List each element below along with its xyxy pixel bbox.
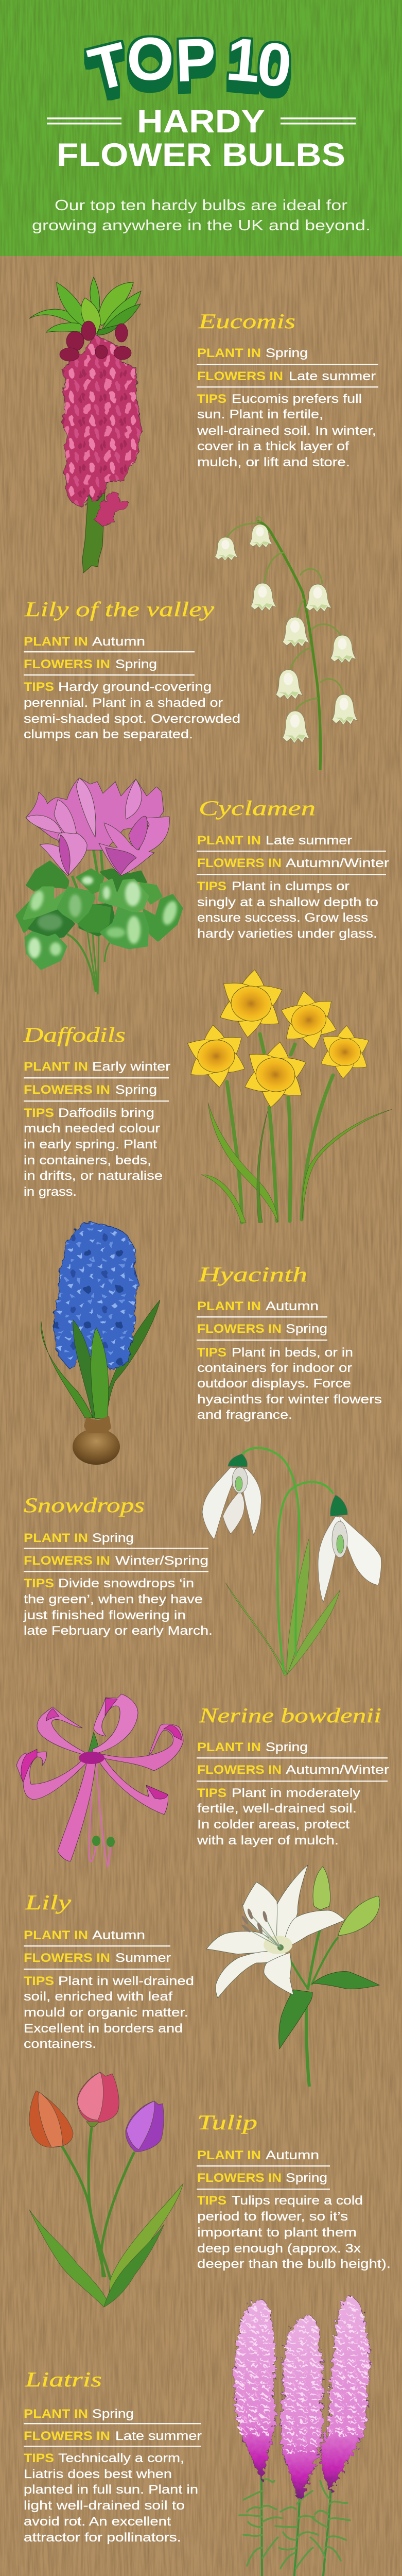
hyacinth back leaves xyxy=(41,1300,160,1418)
tips xyxy=(23,1577,213,1638)
daffodil stems xyxy=(227,1034,333,1223)
tulip leaves xyxy=(29,2183,183,2307)
tips: Tulips require a cold xyxy=(232,2194,363,2208)
plant in xyxy=(24,635,145,649)
plant in: PLANT IN xyxy=(24,1060,88,1074)
plant in xyxy=(24,1531,134,1545)
text block: lily of the valley xyxy=(24,598,240,741)
hyacinth flower spike xyxy=(54,1222,138,1370)
eucomis stem xyxy=(82,489,105,573)
plant in: PLANT IN xyxy=(24,2407,88,2421)
plant in xyxy=(197,1299,319,1313)
plant in: PLANT IN xyxy=(24,1928,88,1942)
plant in: Late summer xyxy=(266,834,352,848)
heading: Snowdrops xyxy=(24,1494,145,1517)
tips: Eucomis prefers full xyxy=(232,392,362,406)
title: TOP 10 xyxy=(82,25,294,105)
intro text: growing anywhere in the UK and beyond. xyxy=(32,217,371,234)
eucomis lower floret xyxy=(94,491,129,527)
title: TOP 10: 1 xyxy=(223,25,263,96)
tips xyxy=(197,1786,360,1848)
flowers in xyxy=(24,2429,202,2443)
tips: TIPS xyxy=(197,392,226,406)
tips: with a layer of mulch. xyxy=(197,1834,339,1848)
intro text xyxy=(32,197,371,234)
lily of the valley bells xyxy=(215,524,358,743)
flowers in: FLOWERS IN xyxy=(24,657,110,671)
plant in: Autumn xyxy=(92,635,145,649)
plant in: Spring xyxy=(92,1531,134,1545)
liatris leaves xyxy=(239,2479,350,2568)
tips: just finished flowering in xyxy=(23,1608,186,1622)
text block: daffodils xyxy=(23,1023,170,1199)
illustration: lily of the valley xyxy=(215,517,358,770)
illustration: hyacinth xyxy=(41,1222,160,1465)
plant in xyxy=(197,834,352,848)
flowers in xyxy=(197,1763,389,1777)
plant in: Autumn xyxy=(92,1928,145,1942)
tips: mould or organic matter. xyxy=(24,2006,188,2020)
tips: late February or early March. xyxy=(24,1624,213,1638)
illustration: tulip xyxy=(29,2072,183,2307)
tips: in grass. xyxy=(24,1185,77,1199)
tips: TIPS xyxy=(197,2194,226,2208)
flowers in: FLOWERS IN xyxy=(24,1554,110,1568)
title: HARDY: HARDY xyxy=(137,104,265,140)
header xyxy=(32,25,371,234)
heading: Lily xyxy=(25,1891,71,1914)
title: TOP 10: P xyxy=(174,26,217,95)
tips: perennial. Plant in a shaded or xyxy=(24,696,223,710)
illustration: lily xyxy=(206,1865,380,2087)
cyclamen leaves xyxy=(17,862,182,969)
heading: Lily of the valley xyxy=(24,598,214,621)
plant in: Spring xyxy=(92,2407,134,2421)
tips: mulch, or lift and store. xyxy=(197,455,350,469)
tips: in early spring. Plant xyxy=(24,1138,157,1151)
nerine stamens xyxy=(90,1759,111,1866)
tips: Plant in well-drained xyxy=(58,1974,194,1988)
flowers in: Late summer xyxy=(289,369,376,383)
snowdrop flower two xyxy=(318,1495,381,1602)
eucomis buds xyxy=(60,321,131,361)
flowers in: Spring xyxy=(286,2171,327,2185)
lily of the valley pedicels xyxy=(227,517,343,710)
plant in: PLANT IN xyxy=(197,1299,261,1313)
tips xyxy=(24,1106,163,1199)
nerine ovary xyxy=(88,1732,100,1756)
lily stems xyxy=(290,1928,338,2087)
flowers in: FLOWERS IN xyxy=(197,2171,282,2185)
plant in xyxy=(197,1740,308,1754)
liatris spikes xyxy=(234,2295,370,2500)
text block: tulip xyxy=(197,2111,391,2271)
text block: snowdrops xyxy=(23,1494,213,1638)
flowers in: FLOWERS IN xyxy=(197,369,283,383)
tips: fertile, well-drained soil. xyxy=(197,1802,357,1816)
tips xyxy=(197,392,376,469)
plant in: Autumn xyxy=(266,2148,319,2162)
tips: sun. Plant in fertile, xyxy=(197,408,323,421)
tips: singly at a shallow depth to xyxy=(197,895,378,909)
flowers in: Winter/Spring xyxy=(115,1554,208,1568)
flowers in xyxy=(197,2171,327,2185)
plant in: PLANT IN xyxy=(24,1531,88,1545)
title: FLOWER BULBS: FLOWER BULBS xyxy=(57,137,345,173)
tips: Plant in clumps or xyxy=(232,879,349,893)
plant in: PLANT IN xyxy=(197,2148,261,2162)
nerine petals xyxy=(16,1694,183,1861)
tips: clumps can be separated. xyxy=(24,727,193,741)
text block: nerine bowdenii xyxy=(197,1704,389,1848)
eucomis leaf crown xyxy=(29,277,141,336)
flowers in: FLOWERS IN xyxy=(24,1951,110,1965)
tulip flower: purple xyxy=(126,2101,164,2151)
lily petals xyxy=(206,1865,345,1998)
title: TOP 10: O xyxy=(127,25,174,93)
tips: well-drained soil. In winter, xyxy=(197,424,376,438)
flowers in xyxy=(24,1083,157,1097)
flowers in: Late summer xyxy=(115,2429,202,2443)
daffodil flowers xyxy=(180,966,375,1112)
heading: Nerine bowdenii xyxy=(199,1704,381,1727)
tulip flower: pink xyxy=(77,2072,119,2127)
tips: light well-drained soil to xyxy=(24,2499,185,2513)
hyacinth bulb xyxy=(73,1416,120,1465)
heading: Hyacinth xyxy=(198,1263,307,1286)
flowers in: FLOWERS IN xyxy=(197,856,282,870)
plant in: PLANT IN xyxy=(197,1740,261,1754)
flowers in: Spring xyxy=(115,657,157,671)
flowers in: Autumn/Winter xyxy=(286,856,389,870)
tips: the green’, when they have xyxy=(24,1592,203,1606)
tips: outdoor displays. Force xyxy=(197,1377,351,1391)
tips: period to flower, so it’s xyxy=(197,2210,348,2224)
illustration: snowdrops xyxy=(202,1448,381,1675)
tips: In colder areas, protect xyxy=(197,1818,349,1832)
flowers in: Spring xyxy=(286,1322,327,1336)
tips: TIPS xyxy=(197,1786,226,1800)
tips: Daffodils bring xyxy=(58,1106,154,1120)
illustration: cyclamen xyxy=(17,778,182,994)
plant in: Early winter xyxy=(92,1060,170,1074)
tips: attractor for pollinators. xyxy=(24,2531,181,2545)
heading: Daffodils xyxy=(23,1023,126,1046)
tips: deeper than the bulb height). xyxy=(197,2257,391,2271)
tips: hardy varieties under glass. xyxy=(197,927,377,941)
plant in xyxy=(197,2148,319,2162)
flowers in: Spring xyxy=(115,1083,157,1097)
illustration: nerine bowdenii xyxy=(16,1694,183,1866)
illustration: liatris xyxy=(234,2295,370,2576)
tips: semi-shaded spot. Overcrowded xyxy=(24,712,240,726)
tips xyxy=(24,2451,198,2545)
snowdrop leaves xyxy=(225,1539,340,1675)
flowers in xyxy=(197,369,376,383)
tips: Technically a corm, xyxy=(58,2451,184,2465)
liatris florets xyxy=(234,2295,370,2452)
lily stamens xyxy=(241,1908,281,1947)
heading: Tulip xyxy=(197,2111,257,2134)
tips: TIPS xyxy=(24,680,54,694)
plant in: Spring xyxy=(266,346,308,360)
lily buds xyxy=(313,1867,380,1936)
tips: in drifts, or naturalise xyxy=(24,1169,163,1183)
text block: cyclamen xyxy=(197,796,389,941)
plant in xyxy=(24,2407,134,2421)
left title rules xyxy=(47,117,121,125)
illustration: eucomis xyxy=(29,277,142,573)
tips: cover in a thick layer of xyxy=(197,439,349,453)
plant in: Spring xyxy=(266,1740,308,1754)
tips: in containers, beds, xyxy=(24,1154,151,1167)
hyacinth front leaves xyxy=(73,1320,109,1419)
nerine anthers xyxy=(92,1836,115,1847)
plant in xyxy=(24,1928,145,1942)
text block: liatris xyxy=(24,2368,202,2545)
tips: TIPS xyxy=(24,1577,54,1590)
title: TOP 10: T xyxy=(82,29,135,105)
tips: hyacinths for winter flowers xyxy=(197,1393,382,1406)
flowers in: Autumn/Winter xyxy=(286,1763,389,1777)
lily leaves xyxy=(279,1972,379,2049)
tips: Hardy ground-covering xyxy=(58,680,212,694)
flowers in xyxy=(197,856,389,870)
tips xyxy=(197,2194,391,2271)
tips: avoid rot. An excellent xyxy=(24,2515,171,2529)
text block: hyacinth xyxy=(197,1263,382,1422)
flowers in: FLOWERS IN xyxy=(24,2429,110,2443)
tulip flower: red xyxy=(29,2091,73,2147)
tips: TIPS xyxy=(24,2451,54,2465)
liatris stems xyxy=(261,2478,330,2576)
tips: Plant in beds, or in xyxy=(232,1346,353,1360)
daffodil leaves xyxy=(201,1103,392,1223)
heading: Cyclamen xyxy=(199,796,316,820)
tips: much needed colour xyxy=(24,1122,160,1136)
plant in: PLANT IN xyxy=(197,834,261,848)
tips: containers for indoor or xyxy=(197,1361,352,1375)
flowers in xyxy=(24,1554,208,1568)
lily of the valley stem xyxy=(257,521,321,770)
tips: TIPS xyxy=(197,1346,226,1360)
tips: TIPS xyxy=(24,1106,54,1120)
cyclamen flowers xyxy=(26,778,169,876)
plant in: PLANT IN xyxy=(197,346,261,360)
text block: eucomis xyxy=(197,310,378,469)
right title rules xyxy=(281,117,356,125)
tips: ensure success. Grow less xyxy=(197,911,368,925)
tips: deep enough (approx. 3x xyxy=(197,2242,361,2256)
title: TOP 10: 0 xyxy=(254,29,294,100)
tips xyxy=(197,1346,382,1422)
tips: planted in full sun. Plant in xyxy=(24,2483,198,2497)
tips: TIPS xyxy=(197,879,226,893)
tips: Divide snowdrops ‘in xyxy=(58,1577,194,1590)
tips xyxy=(24,680,240,741)
tips: containers. xyxy=(24,2037,96,2051)
flowers in: FLOWERS IN xyxy=(197,1322,282,1336)
cyclamen stems xyxy=(67,845,110,994)
snowdrop flower one xyxy=(202,1454,261,1539)
plant in: PLANT IN xyxy=(24,635,88,649)
plant in: Autumn xyxy=(266,1299,319,1313)
flowers in xyxy=(24,1951,171,1965)
text block: lily xyxy=(24,1891,194,2051)
tips: important to plant them xyxy=(197,2226,357,2240)
tips: Plant in moderately xyxy=(232,1786,360,1800)
tips xyxy=(24,1974,194,2051)
plant in xyxy=(197,346,308,360)
tips: soil, enriched with leaf xyxy=(24,1990,172,2004)
heading: Liatris xyxy=(25,2368,102,2391)
tips: TIPS xyxy=(24,1974,54,1988)
eucomis flower column xyxy=(62,335,142,507)
tips: and fragrance. xyxy=(197,1408,292,1422)
flowers in xyxy=(197,1322,327,1336)
tips: Excellent in borders and xyxy=(24,2022,183,2036)
snowdrop stems xyxy=(242,1448,333,1674)
plant in xyxy=(24,1060,170,1074)
tips: Liatris does best when xyxy=(24,2467,172,2481)
flowers in: FLOWERS IN xyxy=(24,1083,110,1097)
flowers in: Summer xyxy=(115,1951,171,1965)
green header band xyxy=(0,0,402,256)
flowers in: FLOWERS IN xyxy=(197,1763,282,1777)
heading: Eucomis xyxy=(198,310,295,333)
tulip stems xyxy=(62,2124,134,2280)
flowers in xyxy=(24,657,157,671)
intro text: Our top ten hardy bulbs are ideal for xyxy=(55,197,347,214)
tips xyxy=(197,879,378,941)
illustration: daffodils xyxy=(180,966,392,1223)
